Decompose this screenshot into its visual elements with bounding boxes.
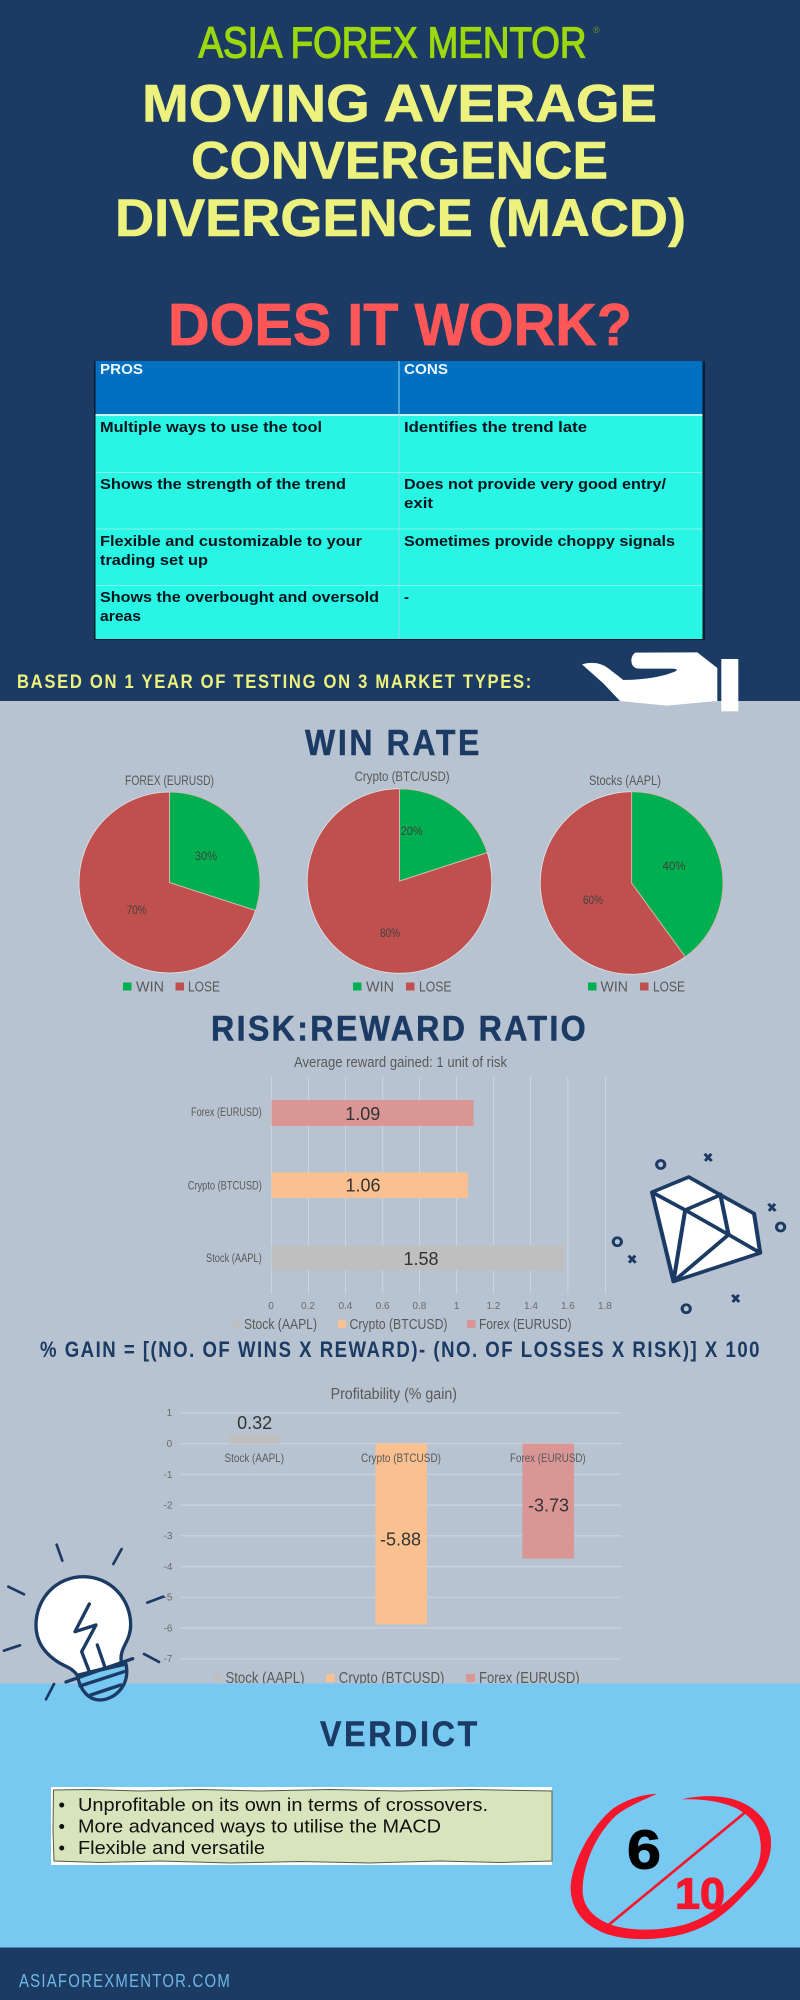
bar: forex: 1.09 <box>345 1104 380 1124</box>
bullet list: More advanced ways to utilise the MACD <box>78 1816 441 1837</box>
pie chart: forex: WIN <box>136 978 164 996</box>
x axis labels: 0.4 <box>338 1301 353 1312</box>
verdict notes box <box>51 1787 552 1865</box>
bar: crypto: 1.06 <box>345 1176 381 1196</box>
panel: results <box>0 701 800 1687</box>
bar: forex <box>191 1100 474 1126</box>
x axis labels: 0.2 <box>301 1301 315 1312</box>
heading: risk reward ratio: RISK:REWARD RATIO <box>211 1010 588 1048</box>
bar: stock <box>224 1413 284 1465</box>
pros and cons table <box>94 361 705 640</box>
pie chart: crypto: WIN <box>366 978 394 996</box>
title: DIVERGENCE (MACD) <box>115 189 686 248</box>
cons rows: Sometimes provide choppy signals <box>404 533 675 550</box>
pie chart: crypto <box>307 768 492 996</box>
bullet list: • <box>58 1837 65 1858</box>
subheading: testing basis: BASED ON 1 YEAR OF TESTING ON 3 MARKET TYPES: <box>17 671 533 693</box>
title <box>115 74 686 248</box>
title: CONVERGENCE <box>191 132 608 190</box>
bar: crypto <box>361 1444 441 1624</box>
pie chart: crypto: Crypto (BTC/USD) <box>355 768 450 784</box>
bar chart: profitability: Profitability (% gain) <box>331 1386 457 1403</box>
x axis labels: 1.8 <box>598 1301 612 1312</box>
title: MOVING AVERAGE <box>142 74 657 134</box>
header panel <box>0 0 800 701</box>
logo: Asia Forex Mentor: ® <box>593 25 600 35</box>
score: 6 out of 10 <box>571 1794 771 1939</box>
y axis labels: -7 <box>164 1654 173 1665</box>
pros rows <box>100 419 379 625</box>
bar chart: profitability <box>164 1386 621 1687</box>
cons rows: Identifies the trend late <box>404 419 587 436</box>
bar: stock: Stock (AAPL) <box>206 1253 262 1265</box>
bar: forex: Forex (EURUSD) <box>510 1451 586 1465</box>
bar chart: risk reward: Average reward gained: 1 unit of risk <box>294 1055 508 1071</box>
pie chart: crypto: LOSE <box>419 978 452 996</box>
legend: Stock (AAPL) <box>226 1670 304 1687</box>
x axis labels: 1.6 <box>561 1301 575 1312</box>
pie chart: stocks: Stocks (AAPL) <box>589 772 661 788</box>
pros rows: areas <box>100 608 141 625</box>
bar chart: risk reward <box>188 1055 612 1333</box>
bar: crypto <box>188 1172 468 1198</box>
legend: Stock (AAPL) <box>244 1316 317 1333</box>
x axis labels: 0.6 <box>376 1301 390 1312</box>
bullet list <box>58 1794 488 1858</box>
pie chart: stocks: 40% <box>662 859 686 873</box>
x axis labels: 1.2 <box>486 1301 501 1312</box>
pie chart: forex <box>79 772 260 996</box>
legend <box>213 1670 580 1687</box>
y axis labels: 0 <box>167 1439 173 1450</box>
x axis labels <box>268 1301 612 1312</box>
y axis labels: -6 <box>164 1624 173 1634</box>
bar: stock <box>206 1246 564 1270</box>
bar: crypto: -5.88 <box>380 1530 421 1550</box>
pie chart: stocks: WIN <box>600 978 628 996</box>
heading: does it work: DOES IT WORK? <box>168 292 632 358</box>
x axis labels: 1.4 <box>524 1301 538 1312</box>
y axis labels: 1 <box>167 1408 173 1419</box>
icon: diamond <box>613 1154 785 1313</box>
y axis labels: -3 <box>164 1531 173 1542</box>
bar: forex: Forex (EURUSD) <box>191 1107 262 1119</box>
pros rows: trading set up <box>100 552 208 569</box>
score: 6 out of 10: 6 <box>627 1818 661 1880</box>
y axis labels: -1 <box>164 1470 173 1481</box>
heading: verdict: VERDICT <box>320 1715 480 1754</box>
bullet list: Unprofitable on its own in terms of crossovers. <box>78 1794 488 1815</box>
bullet list: • <box>58 1816 65 1837</box>
bar: stock: Stock (AAPL) <box>224 1451 284 1465</box>
pie chart: forex: FOREX (EURUSD) <box>125 772 214 788</box>
pros rows: Flexible and customizable to your <box>100 533 362 550</box>
pie chart: crypto: 80% <box>380 926 400 940</box>
footer <box>0 1948 800 2000</box>
logo: Asia Forex Mentor: ASIA FOREX MENTOR <box>198 18 586 68</box>
cons rows <box>404 419 675 606</box>
legend <box>233 1316 572 1333</box>
bar: forex <box>510 1444 586 1558</box>
pie chart: crypto: 20% <box>401 824 423 838</box>
table header: pros: PROS <box>100 362 143 378</box>
pros rows: Shows the strength of the trend <box>100 476 346 493</box>
pie chart: stocks: 60% <box>583 893 603 907</box>
bullet list: • <box>58 1794 65 1815</box>
icon: hand <box>582 652 738 711</box>
pie chart: stocks <box>540 772 723 996</box>
bar: crypto: Crypto (BTCUSD) <box>361 1451 441 1465</box>
legend: Forex (EURUSD) <box>479 1670 580 1687</box>
y axis labels: -2 <box>164 1500 173 1512</box>
legend: Crypto (BTCUSD) <box>339 1670 444 1687</box>
y axis labels: -5 <box>164 1592 173 1604</box>
panel: verdict <box>0 1684 800 1948</box>
pie chart: forex: 30% <box>195 849 217 863</box>
bar: stock: 1.58 <box>403 1249 439 1269</box>
table header: cons: CONS <box>404 362 448 378</box>
pros rows: Multiple ways to use the tool <box>100 419 322 436</box>
x axis labels: 0 <box>268 1301 274 1312</box>
y axis labels: -4 <box>164 1562 173 1573</box>
icon: light bulb <box>4 1545 163 1700</box>
legend: Forex (EURUSD) <box>479 1316 572 1333</box>
bullet list: Flexible and versatile <box>78 1837 265 1858</box>
pie chart: forex: 70% <box>127 903 147 917</box>
score: 6 out of 10: 10 <box>675 1870 725 1918</box>
x axis labels: 0.8 <box>412 1301 427 1312</box>
pros rows: Shows the overbought and oversold <box>100 589 379 606</box>
heading: win rate: WIN RATE <box>305 722 482 763</box>
pie chart: stocks: LOSE <box>653 978 685 996</box>
cons rows: Does not provide very good entry/ <box>404 476 667 493</box>
cons rows: exit <box>404 495 433 512</box>
x axis labels: 1 <box>454 1301 460 1312</box>
bar: crypto: Crypto (BTCUSD) <box>188 1180 262 1192</box>
cons rows: - <box>404 589 409 606</box>
legend: Crypto (BTCUSD) <box>350 1316 448 1333</box>
hand-drawn circle and slash <box>571 1794 771 1939</box>
y axis labels <box>164 1408 173 1665</box>
footer website: ASIAFOREXMENTOR.COM <box>19 1971 231 1991</box>
bar: stock: 0.32 <box>237 1413 272 1433</box>
pie chart: forex: LOSE <box>188 978 220 996</box>
bar: forex: -3.73 <box>528 1496 569 1516</box>
